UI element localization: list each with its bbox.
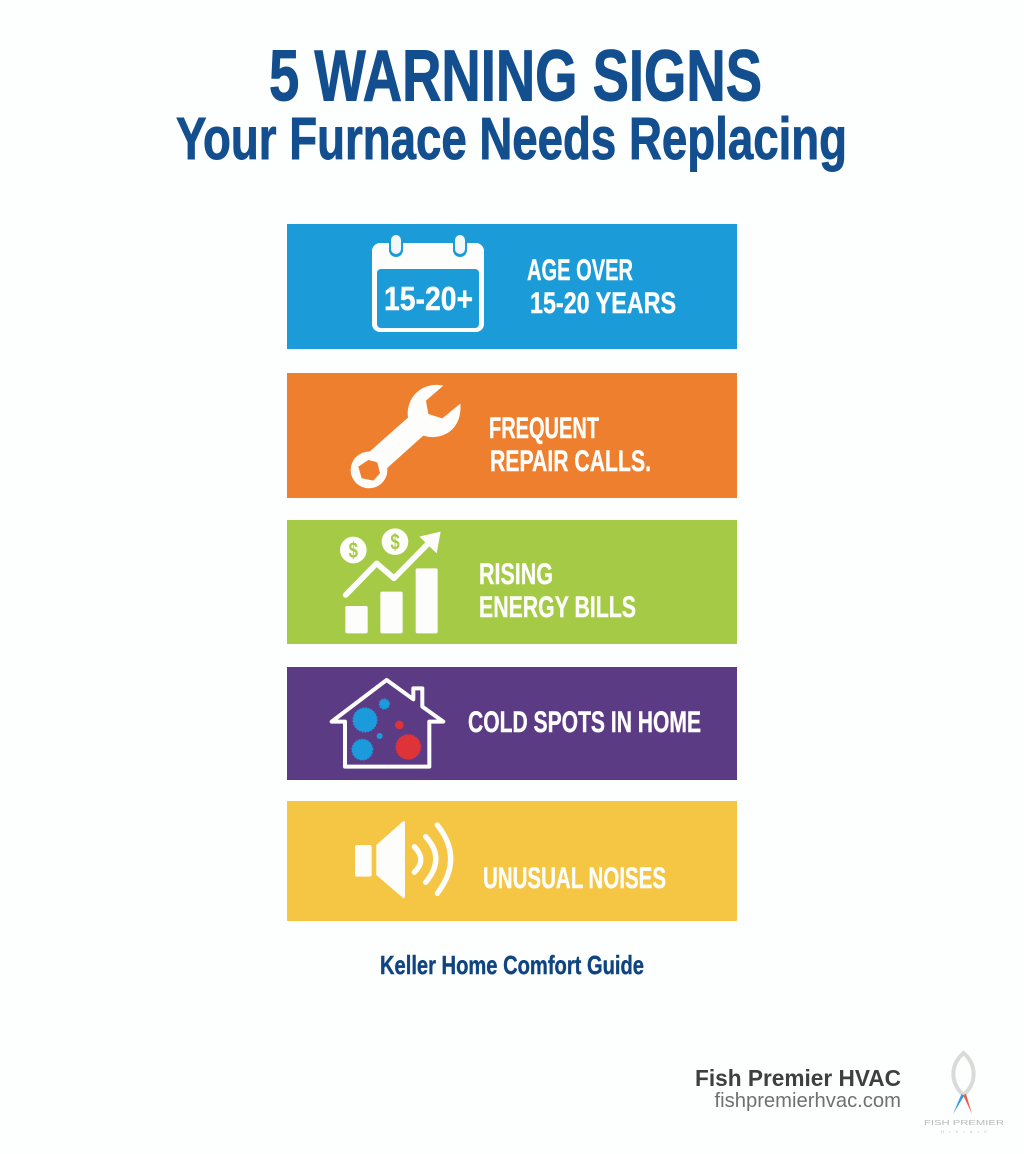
- logo: Fish Premier HVAC: [924, 1053, 1004, 1134]
- icon: rising cost chart: $: [349, 538, 358, 563]
- logo: Fish Premier HVAC: FISH PREMIER: [924, 1120, 1004, 1127]
- label: rising energy bills: ENERGY BILLS: [479, 591, 636, 624]
- label: age over 15-20 years: [527, 254, 676, 320]
- panel: frequent repair calls: [287, 373, 737, 498]
- icon: calendar: 15-20+: [384, 280, 473, 317]
- label: frequent repair calls: FREQUENT: [489, 412, 599, 445]
- label: cold spots in home: COLD SPOTS IN HOME: [468, 706, 701, 739]
- label: age over 15-20 years: 15-20 YEARS: [530, 287, 676, 320]
- subtitle: Keller Home Comfort Guide: Keller Home Comfort Guide: [380, 950, 644, 980]
- footer brand text: fishpremierhvac.com: [714, 1090, 901, 1112]
- title: [176, 36, 847, 172]
- footer brand text: Fish Premier HVAC: [695, 1065, 901, 1091]
- label: frequent repair calls: [489, 412, 651, 478]
- icon: calendar: [372, 233, 484, 332]
- icon: rising cost chart: [340, 528, 441, 633]
- panel: cold spots in home: [287, 667, 737, 780]
- label: rising energy bills: [479, 558, 636, 624]
- icon: rising cost chart: $: [390, 530, 400, 555]
- panel: rising energy bills: [287, 520, 737, 644]
- footer brand text: [695, 1065, 901, 1112]
- icon: house with cold and hot spots: [332, 680, 443, 767]
- title: Your Furnace Needs Replacing: [176, 106, 847, 172]
- label: age over 15-20 years: AGE OVER: [527, 254, 633, 287]
- label: rising energy bills: RISING: [479, 558, 553, 591]
- label: frequent repair calls: REPAIR CALLS.: [490, 445, 651, 478]
- logo: Fish Premier HVAC: H•V•A•C: [941, 1129, 987, 1134]
- panel: age over 15-20 years: [287, 224, 737, 349]
- panel: unusual noises: [287, 801, 737, 921]
- icon: wrench: [351, 385, 461, 488]
- icon: speaker: [355, 821, 451, 898]
- title: 5 WARNING SIGNS: [269, 36, 762, 116]
- label: unusual noises: UNUSUAL NOISES: [483, 862, 666, 895]
